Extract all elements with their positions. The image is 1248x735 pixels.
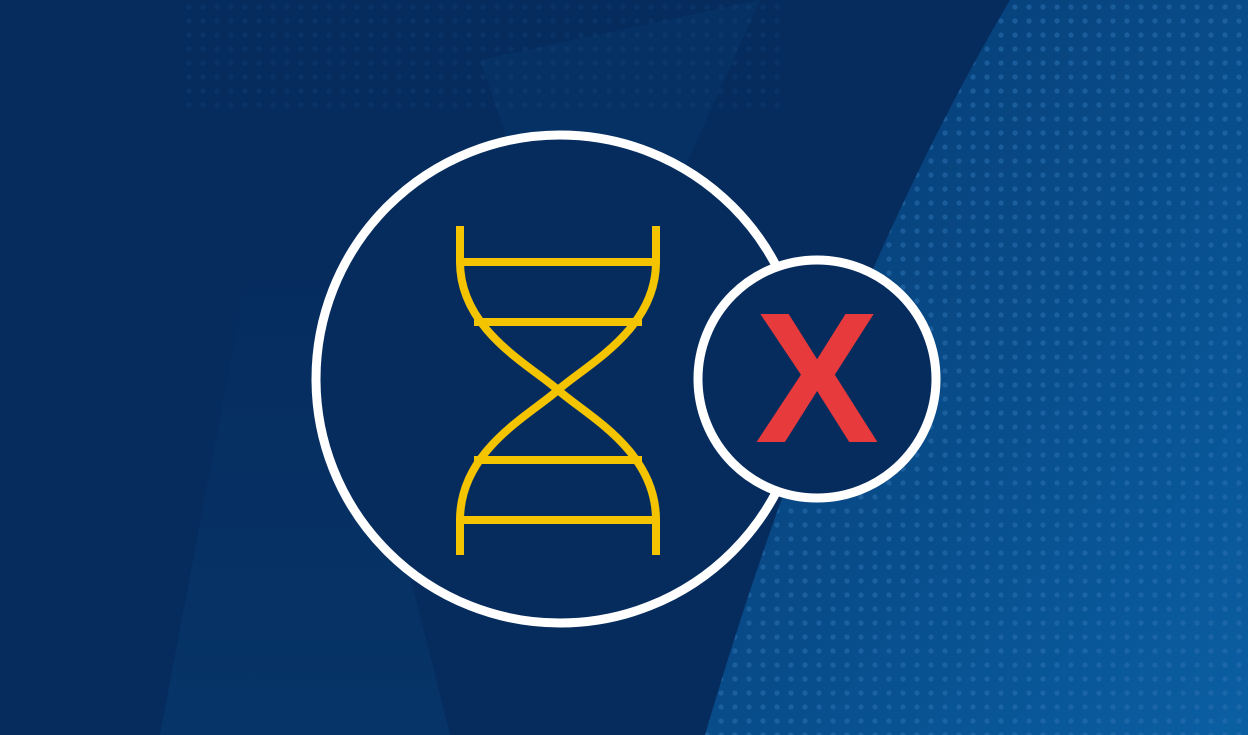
small circle badge: [698, 260, 936, 498]
icon: red X: X: [755, 275, 879, 482]
big circle: [316, 135, 804, 623]
icon: DNA helix: [460, 226, 656, 555]
